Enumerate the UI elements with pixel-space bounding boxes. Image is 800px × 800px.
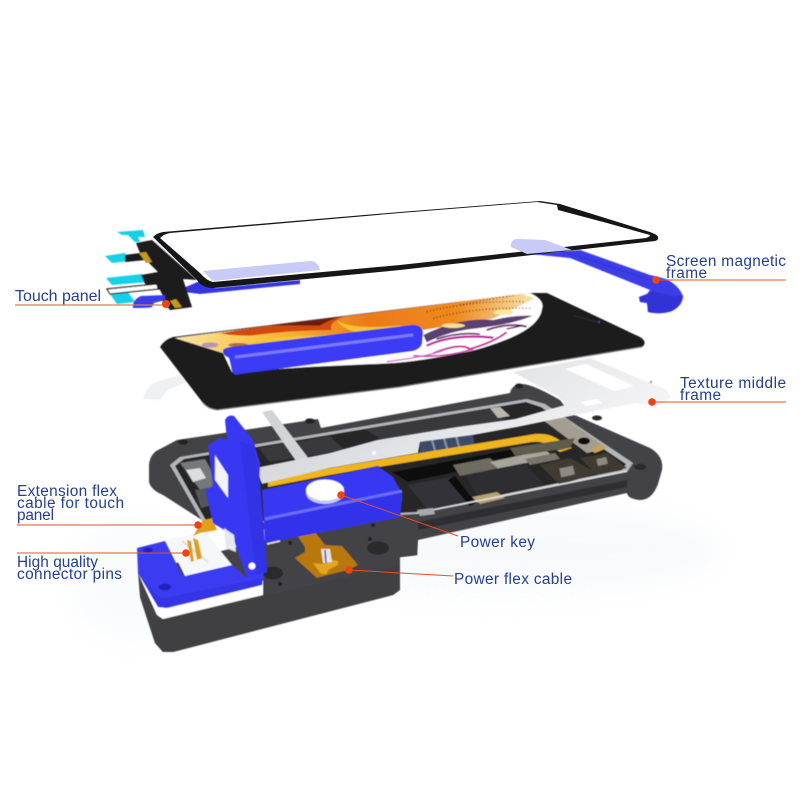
white layer	[138, 573, 263, 619]
yellow flex strip	[268, 434, 572, 487]
callout: power key: Power key	[460, 534, 535, 551]
striped chip	[420, 435, 475, 455]
wallpaper	[170, 290, 550, 375]
icon: connector pins	[187, 538, 202, 562]
callout: screen magnetic frame: frame	[666, 265, 707, 282]
panel: texture middle frame	[143, 358, 671, 484]
callout: extension flex cable	[17, 483, 202, 529]
blue lower plate	[137, 541, 264, 608]
phone centre blue bar	[223, 325, 423, 375]
callout: touch panel: Touch panel	[15, 288, 101, 305]
white outlined strip	[107, 284, 158, 294]
callout: extension flex cable: panel	[17, 507, 54, 524]
power flex cable	[295, 532, 358, 578]
slot	[565, 364, 634, 391]
callout: connector pins: connector pins	[17, 566, 122, 583]
rib	[262, 410, 310, 464]
callout: extension flex cable: Extension flex	[17, 483, 117, 500]
callout: connector pins: High quality	[17, 554, 98, 571]
gold contacts	[139, 252, 152, 263]
blue hook	[133, 295, 165, 308]
callout: texture middle frame: Texture middle	[680, 375, 786, 392]
panel: blue stand and front base	[137, 416, 417, 652]
icon: touch panel flex cables	[105, 230, 197, 310]
callout: extension flex cable: cable for touch	[17, 495, 124, 512]
callout: texture middle frame	[648, 375, 786, 406]
callout: connector pins	[17, 549, 190, 583]
callout: screen magnetic frame: Screen magnetic	[666, 253, 786, 270]
see-through handles	[203, 261, 320, 281]
panel: screen magnetic frame handle	[176, 250, 683, 313]
callout: power key	[337, 491, 535, 551]
main chips	[407, 477, 473, 512]
callout: touch panel	[15, 288, 170, 308]
hinge plate	[205, 416, 267, 577]
icon: power key	[306, 480, 344, 504]
phone body	[160, 293, 645, 410]
camera area	[543, 417, 607, 453]
panel: phone screen	[160, 290, 645, 410]
callout: power flex cable: Power flex cable	[454, 571, 572, 588]
ground shadow	[70, 505, 720, 640]
base front block	[138, 515, 417, 652]
panel: glass touch frame	[153, 201, 658, 288]
lower bar	[255, 358, 671, 484]
left tab	[143, 375, 186, 400]
board recess	[170, 399, 633, 526]
left strip	[176, 280, 300, 294]
tray body	[149, 384, 662, 557]
white inset	[167, 532, 232, 576]
callout: texture middle frame: frame	[680, 387, 721, 404]
black flex	[125, 240, 197, 310]
icon: extension flex cable	[193, 518, 217, 536]
callout: power flex cable	[345, 566, 572, 588]
upper chips	[258, 436, 345, 462]
cyan tabs	[117, 230, 145, 242]
power key block	[262, 466, 402, 544]
connector area on left	[180, 459, 222, 495]
callout: screen magnetic frame	[652, 253, 786, 284]
black band	[392, 446, 565, 482]
earpiece	[574, 316, 598, 322]
components	[453, 458, 500, 476]
base tray with circuit board	[149, 384, 662, 557]
glass body	[153, 201, 658, 288]
